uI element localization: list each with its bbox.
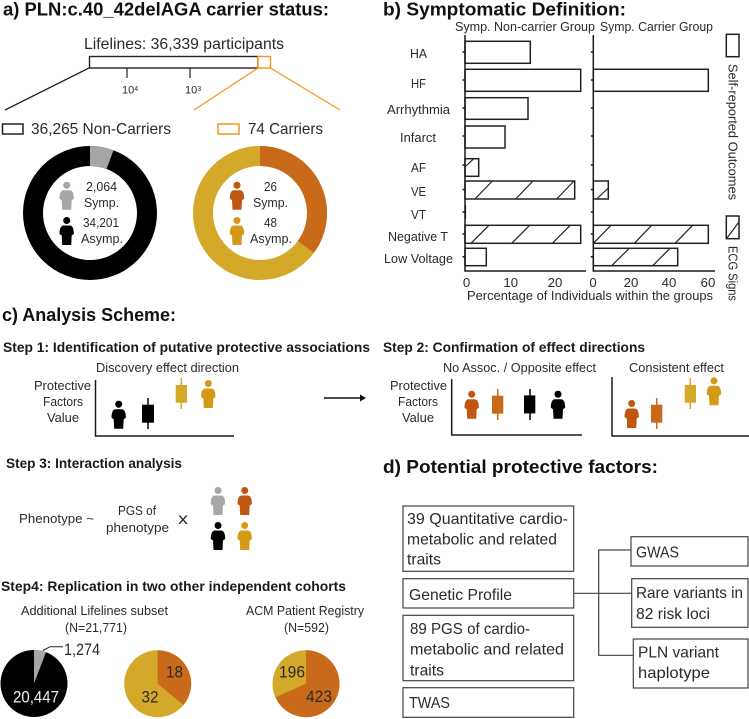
heading c: c) Analysis Scheme: (2, 304, 176, 325)
x-axis tick labels: 0 (589, 275, 597, 290)
column title: non-carrier: Symp. Non-carrier Group (455, 19, 595, 34)
step 2 heading: Step 2: Confirmation of effect directions (383, 340, 645, 356)
step 1 y-axis label: Value (47, 410, 79, 425)
interaction formula (19, 503, 188, 535)
step 3 heading: Step 3: Interaction analysis (6, 456, 182, 472)
panel a: carrier status (2, 0, 340, 270)
cohort label: ACM registry (246, 603, 364, 635)
box: quantitative traits: 39 Quantitative cardio- (407, 511, 568, 528)
non-carrier asymptomatic count: 34,201 (83, 215, 119, 230)
cohort scale bar (5, 56, 340, 110)
pie: Lifelines non-carriers: 1,274 (64, 641, 100, 659)
icon: orange person (230, 182, 244, 210)
donut: non-carriers (33, 146, 147, 270)
non-carrier symptomatic count: 2,064 (86, 179, 117, 194)
category labels (384, 46, 453, 266)
step 2 axes: consistent (612, 377, 749, 436)
step 2 chart title: no association: No Assoc. / Opposite effect (443, 360, 596, 375)
legend: ECG signs label: ECG Signs (726, 246, 740, 301)
box: genetic profile: Genetic Profile (409, 587, 512, 604)
pie: Lifelines non-carriers: 20,447 (13, 689, 59, 707)
step 2 y-axis label: Factors (398, 394, 438, 409)
box: GWAS (631, 537, 748, 566)
legend: carriers: 74 Carriers (248, 121, 323, 138)
scale label 10^3: 3 (197, 86, 201, 93)
panel c: analysis scheme (0, 304, 749, 717)
box: PGS traits: metabolic and related (410, 642, 564, 659)
interaction formula: x (178, 511, 188, 528)
interaction formula: phenotype (106, 520, 169, 535)
legend: carriers (218, 121, 323, 138)
box plot: orange (651, 398, 662, 429)
category labels: VT (411, 207, 426, 222)
box plot: black (524, 389, 535, 420)
non-carrier asymptomatic count: Asymp. (81, 231, 123, 246)
interaction formula: Phenotype ~ (19, 511, 94, 526)
step 2 axes: no association (452, 379, 582, 435)
step 1 axes (96, 380, 234, 436)
icon: black person (112, 401, 126, 429)
non-carrier symptomatic count: Symp. (84, 195, 119, 210)
step 1 heading: Step 1: Identification of putative protective associations (3, 340, 370, 356)
cohort label: ACM registry: ACM Patient Registry (246, 603, 364, 618)
carrier asymptomatic count: Asymp. (250, 231, 292, 246)
icon: yellow person (201, 380, 216, 408)
icon: grey person (59, 182, 74, 210)
step 1 chart title: Discovery effect direction (96, 360, 239, 375)
icon: black person (59, 217, 74, 245)
pie: ACM registry: 196 (279, 664, 305, 682)
step 4 heading: Step4: Replication in two other independent cohorts (1, 579, 346, 595)
non-carrier symptomatic count (84, 179, 119, 210)
pie: Lifelines carriers: 18 (166, 664, 183, 682)
scale label 10^4: 10 (122, 84, 134, 96)
x-axis tick labels: 20 (624, 275, 638, 290)
step 1 y-axis label (34, 378, 91, 425)
carrier symptomatic count: 26 (264, 179, 277, 194)
legend: self-reported outcomes label: Self-reported Outcomes (726, 64, 740, 200)
carrier asymptomatic count: 48 (264, 215, 277, 230)
icon: yellow person (707, 377, 721, 405)
box: quantitative traits: traits (407, 551, 441, 568)
step 2 y-axis label: Protective (390, 378, 447, 393)
column title: carrier: Symp. Carrier Group (600, 19, 713, 34)
box: PLN haplotype: haplotype (638, 665, 710, 682)
x-axis tick labels: 0 (463, 275, 470, 290)
box: rare variants (632, 579, 748, 627)
heading d: d) Potential protective factors: (383, 456, 658, 477)
step 2 y-axis label (390, 378, 447, 425)
box plot: yellow (685, 378, 696, 409)
step 2 y-axis label: Value (402, 410, 434, 425)
category labels: Low Voltage (384, 251, 453, 266)
category labels: HA (410, 46, 427, 61)
box: PLN haplotype (633, 639, 748, 688)
category labels: Infarct (400, 130, 436, 145)
pie: ACM registry (272, 650, 340, 717)
category labels: Negative T (388, 229, 448, 244)
pie: Lifelines carriers (124, 650, 191, 717)
legend: self-reported outcomes swatch (726, 34, 739, 57)
legend: non-carriers: 36,265 Non-Carriers (31, 121, 171, 138)
step 2 chart title: consistent: Consistent effect (629, 360, 724, 375)
arrow: step 1 to step 2 (324, 394, 366, 402)
scale label 10^4: 4 (134, 86, 138, 93)
category labels: Arrhythmia (387, 102, 451, 117)
box: PGS traits: traits (410, 663, 444, 680)
x-axis tick labels (463, 275, 715, 290)
carrier symptomatic count: Symp. (253, 195, 288, 210)
category labels: HF (411, 76, 426, 91)
box: genetic profile (403, 579, 574, 608)
cohort label: Lifelines: 36,339 participants (84, 36, 284, 53)
legend: ECG signs swatch (726, 216, 739, 239)
scale label 10^3: 10 (185, 84, 197, 96)
box: PGS traits: 89 PGS of cardio- (410, 621, 530, 638)
box: TWAS: TWAS (409, 695, 450, 712)
category labels: VE (411, 184, 426, 199)
cohort label: Lifelines subset (21, 603, 168, 635)
category labels: AF (411, 160, 426, 175)
icon: black person (551, 391, 565, 419)
pie: Lifelines non-carriers (0, 641, 100, 717)
cohort label: Lifelines subset: (N=21,771) (65, 620, 127, 635)
interaction formula: PGS of (118, 503, 156, 518)
icon: yellow person (230, 217, 244, 245)
donut: carriers (203, 146, 327, 270)
pie: ACM registry: 423 (306, 688, 332, 706)
box: rare variants: 82 risk loci (636, 606, 710, 623)
step 1 y-axis label: Protective (34, 378, 91, 393)
x-axis tick labels: 10 (503, 275, 518, 290)
carrier asymptomatic count (250, 215, 292, 246)
bar chart: carrier group (591, 35, 715, 271)
box plot: black (142, 398, 154, 429)
carrier symptomatic count (253, 179, 288, 210)
box: PGS traits (403, 615, 574, 681)
bar chart: non-carrier group (462, 35, 586, 271)
x-axis tick labels: 60 (701, 275, 715, 290)
icon: orange person (464, 391, 479, 419)
pie: Lifelines carriers: 32 (142, 689, 158, 707)
box: TWAS (403, 688, 574, 717)
x-axis title: Percentage of Individuals within the groups (467, 288, 713, 303)
box: GWAS: GWAS (636, 544, 679, 561)
x-axis tick labels: 20 (548, 275, 562, 290)
box: quantitative traits (403, 506, 574, 571)
panel b: symptomatic definition (383, 0, 740, 303)
non-carrier asymptomatic count (81, 215, 123, 246)
box plot: orange (492, 389, 503, 420)
connectors (574, 550, 633, 655)
step 1 y-axis label: Factors (43, 394, 83, 409)
icon: orange person (624, 400, 639, 428)
x-axis tick labels: 40 (662, 275, 676, 290)
box plot: yellow (176, 378, 187, 409)
icon group: four phenotype persons (211, 487, 252, 550)
box: PLN haplotype: PLN variant (638, 644, 720, 661)
panel d: potential protective factors (383, 456, 748, 717)
cohort label: ACM registry: (N=592) (284, 620, 329, 635)
box: rare variants: Rare variants in (636, 585, 743, 602)
cohort label: Lifelines subset: Additional Lifelines subset (21, 603, 168, 618)
box: quantitative traits: metabolic and related (407, 531, 557, 548)
